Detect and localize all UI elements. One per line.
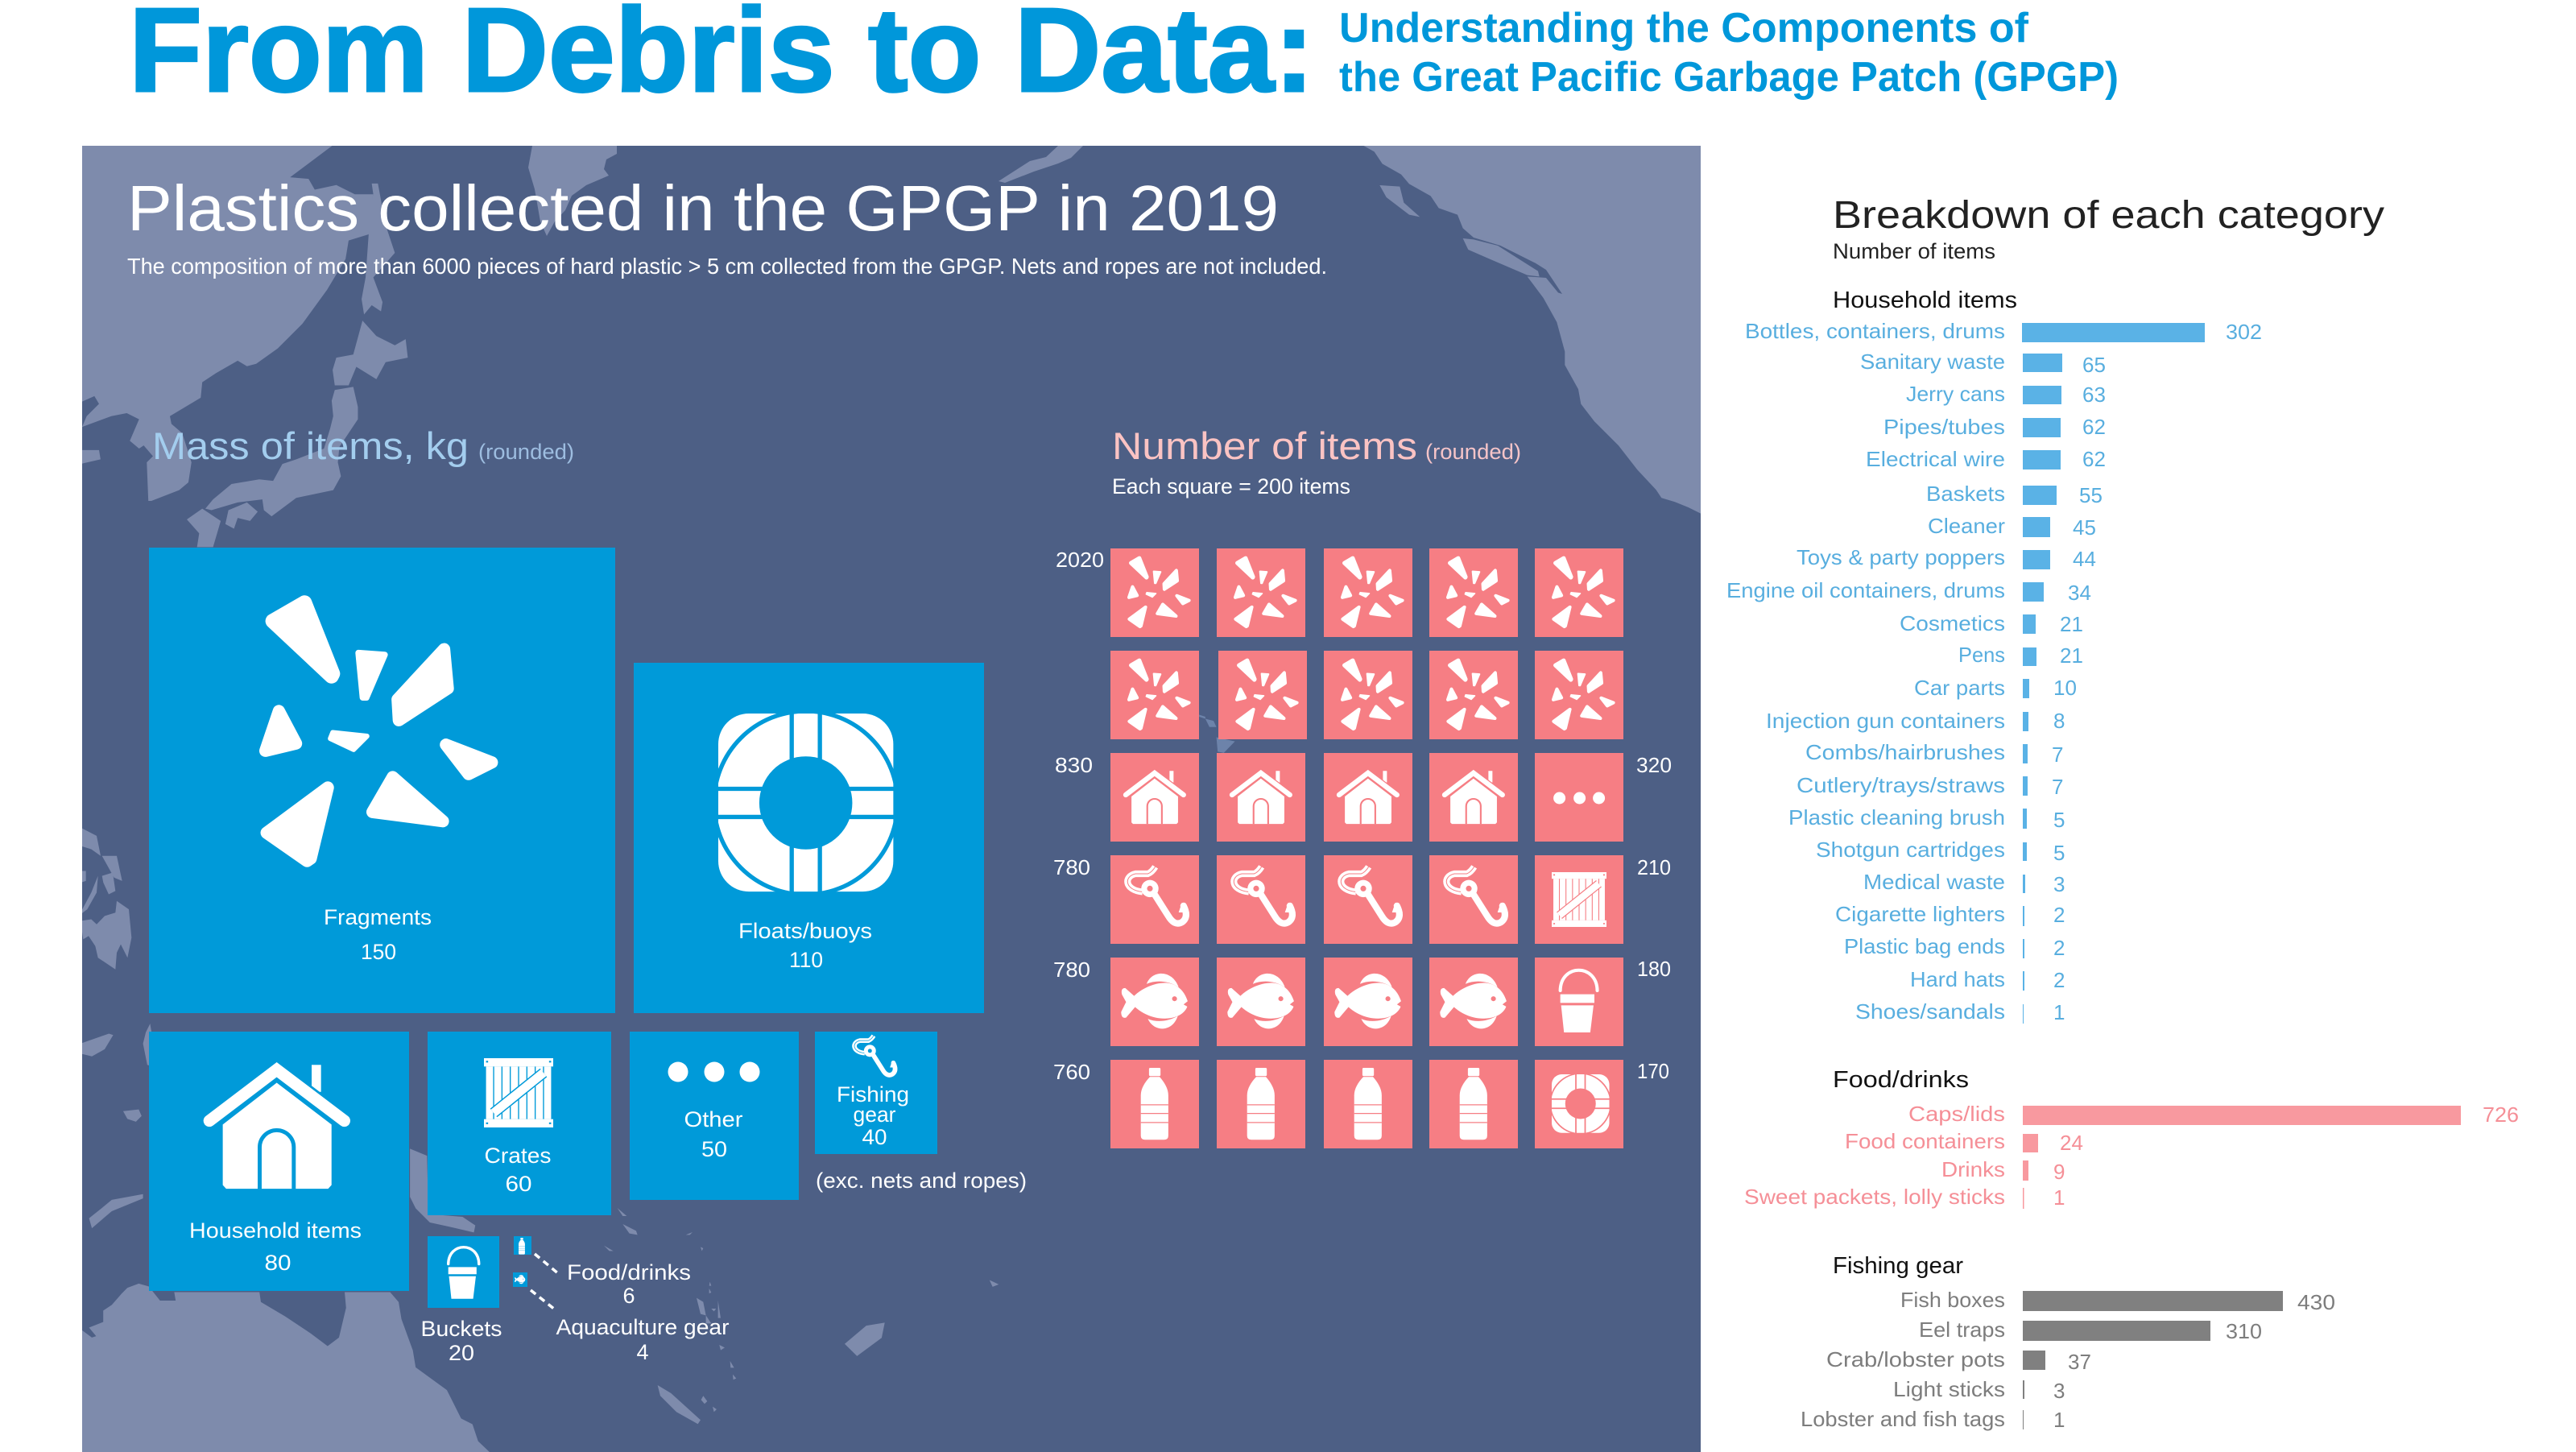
bar: pipes and tubes: Pipes/tubes <box>1883 415 2005 439</box>
row: fish 780, bucket 180 <box>1053 957 1671 1046</box>
bar: pipes and tubes <box>1883 415 2106 439</box>
map: land masses <box>81 145 1701 1452</box>
bar: car parts: Car parts <box>1914 676 2005 700</box>
bar: medical waste <box>1863 870 2065 896</box>
box: crates: 60 <box>506 1172 531 1196</box>
bar: cosmetics: Cosmetics <box>1900 611 2005 635</box>
row: fragments continued <box>1110 651 1623 739</box>
row: bottles 760, buoy 170 <box>1053 1059 1669 1148</box>
box: household items: Household items <box>189 1218 362 1243</box>
heading: number of items: (rounded) <box>1425 440 1521 464</box>
heading: mass of items: (rounded) <box>478 440 574 464</box>
box: food and drinks: 6 <box>622 1284 635 1308</box>
box: household items: 80 <box>264 1251 292 1275</box>
box: other: 50 <box>701 1137 727 1161</box>
bar: lobster and fish tags: 1 <box>2053 1408 2065 1432</box>
box: buckets: Buckets <box>420 1317 502 1341</box>
box: aquaculture gear <box>513 1272 730 1364</box>
bar: sweet packets and lolly sticks: Sweet packets, lolly sticks <box>1744 1185 2005 1209</box>
bar: electrical wire: 62 <box>2082 447 2106 471</box>
bar: electrical wire <box>1866 447 2106 471</box>
row: bottles 760, buoy 170: 170 <box>1637 1059 1669 1083</box>
row: fish 780, bucket 180: 180 <box>1637 957 1671 981</box>
note: excluding nets and ropes: (exc. nets and ropes) <box>816 1169 1027 1193</box>
box: floats and buoys <box>634 663 984 1013</box>
bar: cleaner: Cleaner <box>1928 514 2005 538</box>
bar: medical waste: 3 <box>2053 872 2065 896</box>
bar: shoes and sandals: 1 <box>2053 1000 2065 1024</box>
subtitle: the Great Pacific Garbage Patch (GPGP) <box>1339 54 2119 101</box>
bar chart: fishing gear <box>1801 1253 2335 1432</box>
box: fishing gear: gear <box>854 1102 896 1127</box>
bar: combs and hairbrushes: 7 <box>2052 743 2063 767</box>
bar: medical waste: Medical waste <box>1863 870 2005 894</box>
bar: cutlery, trays, straws: Cutlery/trays/straws <box>1797 773 2005 797</box>
row: bottles 760, buoy 170: 760 <box>1053 1060 1090 1084</box>
row: household 830, other 320 <box>1055 753 1672 842</box>
row: hooks 780, crate 210 <box>1053 855 1671 944</box>
treemap: mass of items <box>149 548 1027 1365</box>
heading: breakdown of each category <box>1833 194 2384 263</box>
row: fragments 2020 <box>1056 548 1623 637</box>
bar: fish boxes: Fish boxes <box>1900 1288 2005 1312</box>
bar: shotgun cartridges: 5 <box>2053 841 2065 865</box>
bar: bottles <box>1745 319 2262 344</box>
bar: shoes and sandals: Shoes/sandals <box>1855 999 2005 1024</box>
bar: food containers <box>1845 1129 2083 1155</box>
bar: car parts <box>1914 676 2077 700</box>
bar: plastic cleaning brush <box>1788 805 2065 832</box>
box: crates <box>428 1032 611 1215</box>
bar: combs and hairbrushes: Combs/hairbrushes <box>1805 740 2005 764</box>
bar: eel traps: 310 <box>2226 1319 2262 1343</box>
bar: plastic cleaning brush: 5 <box>2053 808 2065 832</box>
box: aquaculture gear: 4 <box>636 1340 649 1364</box>
bar: light sticks: Light sticks <box>1893 1377 2005 1401</box>
bar: lobster and fish tags: Lobster and fish tags <box>1801 1407 2005 1431</box>
bar: cosmetics <box>1900 611 2083 636</box>
heading: food and drinks: Food/drinks <box>1833 1067 1969 1093</box>
bar: crab and lobster pots <box>1826 1347 2091 1374</box>
heading: number of items <box>1112 424 1521 498</box>
bar: plastic bag ends: Plastic bag ends <box>1844 934 2005 958</box>
bar: crab and lobster pots: 37 <box>2068 1350 2091 1374</box>
bar: bottles: 302 <box>2226 320 2262 344</box>
bar: sanitary waste: 65 <box>2082 353 2106 377</box>
row: hooks 780, crate 210: 210 <box>1637 855 1671 879</box>
bar: baskets: Baskets <box>1926 482 2005 506</box>
box: floats and buoys: 110 <box>789 948 823 972</box>
panel description: The composition of more than 6000 pieces of hard plastic > 5 cm collected from the GPGP. Nets and ropes are not included. <box>127 254 1327 279</box>
bar: sanitary waste <box>1860 350 2106 377</box>
bar: cutlery, trays, straws: 7 <box>2052 775 2063 799</box>
heading: number of items: Number of items <box>1112 424 1417 467</box>
bar: drinks: Drinks <box>1941 1157 2005 1181</box>
box: food and drinks: Food/drinks <box>567 1260 691 1284</box>
bar: drinks <box>1941 1157 2065 1184</box>
bar: shoes and sandals <box>1855 999 2065 1024</box>
heading: household items: Household items <box>1833 288 2017 313</box>
box: floats and buoys: Floats/buoys <box>738 919 872 943</box>
bar: pens: 21 <box>2060 643 2083 668</box>
box: other <box>630 1032 799 1200</box>
bar: eel traps <box>1919 1318 2262 1343</box>
bar: caps and lids <box>1908 1102 2519 1127</box>
bar: toys and party poppers: 44 <box>2073 547 2096 571</box>
heading: breakdown of each category: Breakdown of each category <box>1833 194 2384 237</box>
bar: baskets <box>1926 482 2103 507</box>
box: household items <box>149 1032 409 1291</box>
panel heading: Plastics collected in the GPGP in 2019 <box>127 172 1279 244</box>
bar: bottles: Bottles, containers, drums <box>1745 319 2005 343</box>
bar: hard hats: Hard hats <box>1910 967 2005 991</box>
bar: drinks: 9 <box>2053 1160 2065 1184</box>
bar: pens <box>1958 643 2083 668</box>
bar: cleaner <box>1928 514 2096 540</box>
bar: light sticks: 3 <box>2053 1379 2065 1403</box>
bar: food containers: Food containers <box>1845 1129 2005 1153</box>
bar: caps and lids: Caps/lids <box>1908 1102 2005 1126</box>
bar: plastic bag ends <box>1844 934 2065 960</box>
row: household 830, other 320: 320 <box>1636 753 1672 777</box>
bar: electrical wire: Electrical wire <box>1866 447 2005 471</box>
box: fragments: Fragments <box>324 905 432 929</box>
bar: toys and party poppers <box>1797 545 2096 571</box>
box: fragments: 150 <box>361 940 396 964</box>
bar: engine oil containers: 34 <box>2068 581 2091 605</box>
bar: eel traps: Eel traps <box>1919 1318 2005 1342</box>
bar: cigarette lighters: Cigarette lighters <box>1835 902 2005 926</box>
bar: light sticks <box>1893 1377 2065 1403</box>
bar: cigarette lighters <box>1835 902 2065 927</box>
bar: sweet packets and lolly sticks: 1 <box>2053 1185 2065 1210</box>
box: fishing gear: 40 <box>862 1125 887 1149</box>
heading: number of items: Each square = 200 items <box>1112 474 1350 498</box>
bar: caps and lids: 726 <box>2483 1102 2519 1127</box>
box: fragments <box>149 548 615 1013</box>
bar chart: household items <box>1726 288 2262 1024</box>
bar: engine oil containers: Engine oil containers, drums <box>1726 578 2005 602</box>
bar: food containers: 24 <box>2060 1131 2083 1155</box>
row: hooks 780, crate 210: 780 <box>1053 855 1090 879</box>
heading: mass of items <box>152 424 574 467</box>
bar: hard hats: 2 <box>2053 968 2065 992</box>
heading: mass of items: Mass of items, kg <box>152 424 469 467</box>
bar: cleaner: 45 <box>2073 515 2096 540</box>
bar: fish boxes <box>1900 1288 2335 1314</box>
bar: fish boxes: 430 <box>2297 1290 2335 1314</box>
heading: fishing gear: Fishing gear <box>1833 1253 1963 1279</box>
box: crates: Crates <box>485 1144 551 1168</box>
bar: plastic bag ends: 2 <box>2053 936 2065 960</box>
bar: injection gun containers: 8 <box>2053 709 2065 733</box>
bar: car parts: 10 <box>2053 676 2077 700</box>
subtitle: Understanding the Components of <box>1339 5 2029 52</box>
bar: jerry cans: 63 <box>2082 383 2106 407</box>
bar: injection gun containers: Injection gun containers <box>1766 709 2005 733</box>
box: buckets <box>420 1236 502 1365</box>
bar: jerry cans <box>1906 382 2106 407</box>
waffle chart: number of items <box>1053 548 1672 1148</box>
row: fish 780, bucket 180: 780 <box>1053 958 1090 982</box>
bar: cosmetics: 21 <box>2060 612 2083 636</box>
box: other: Other <box>684 1107 743 1131</box>
panel: plastics collected map <box>81 145 1701 1452</box>
bar chart: food and drinks <box>1744 1067 2519 1210</box>
bar: shotgun cartridges: Shotgun cartridges <box>1816 838 2005 862</box>
bar: sanitary waste: Sanitary waste <box>1860 350 2005 374</box>
bar: jerry cans: Jerry cans <box>1906 382 2005 406</box>
box: buckets: 20 <box>449 1341 474 1365</box>
bar: cutlery, trays, straws <box>1797 773 2063 799</box>
bar: shotgun cartridges <box>1816 838 2065 865</box>
bar: pens: Pens <box>1958 643 2005 667</box>
box: fishing gear: Fishing <box>837 1082 909 1107</box>
bar: plastic cleaning brush: Plastic cleaning brush <box>1788 805 2005 829</box>
box: aquaculture gear: Aquaculture gear <box>556 1315 730 1339</box>
subtitle <box>1339 5 2119 101</box>
row: fragments 2020: 2020 <box>1056 548 1104 572</box>
bar: cigarette lighters: 2 <box>2053 903 2065 927</box>
bar: toys and party poppers: Toys & party poppers <box>1797 545 2005 569</box>
bar: combs and hairbrushes <box>1805 740 2063 767</box>
box: food and drinks <box>514 1236 691 1308</box>
bar: engine oil containers <box>1726 578 2091 605</box>
box: fishing gear <box>815 1032 937 1154</box>
bar: pipes and tubes: 62 <box>2082 415 2106 439</box>
bar: hard hats <box>1910 967 2065 992</box>
bar: baskets: 55 <box>2079 483 2103 507</box>
heading: breakdown of each category: Number of items <box>1833 239 1995 263</box>
bar: crab and lobster pots: Crab/lobster pots <box>1826 1347 2005 1371</box>
row: household 830, other 320: 830 <box>1055 753 1093 777</box>
